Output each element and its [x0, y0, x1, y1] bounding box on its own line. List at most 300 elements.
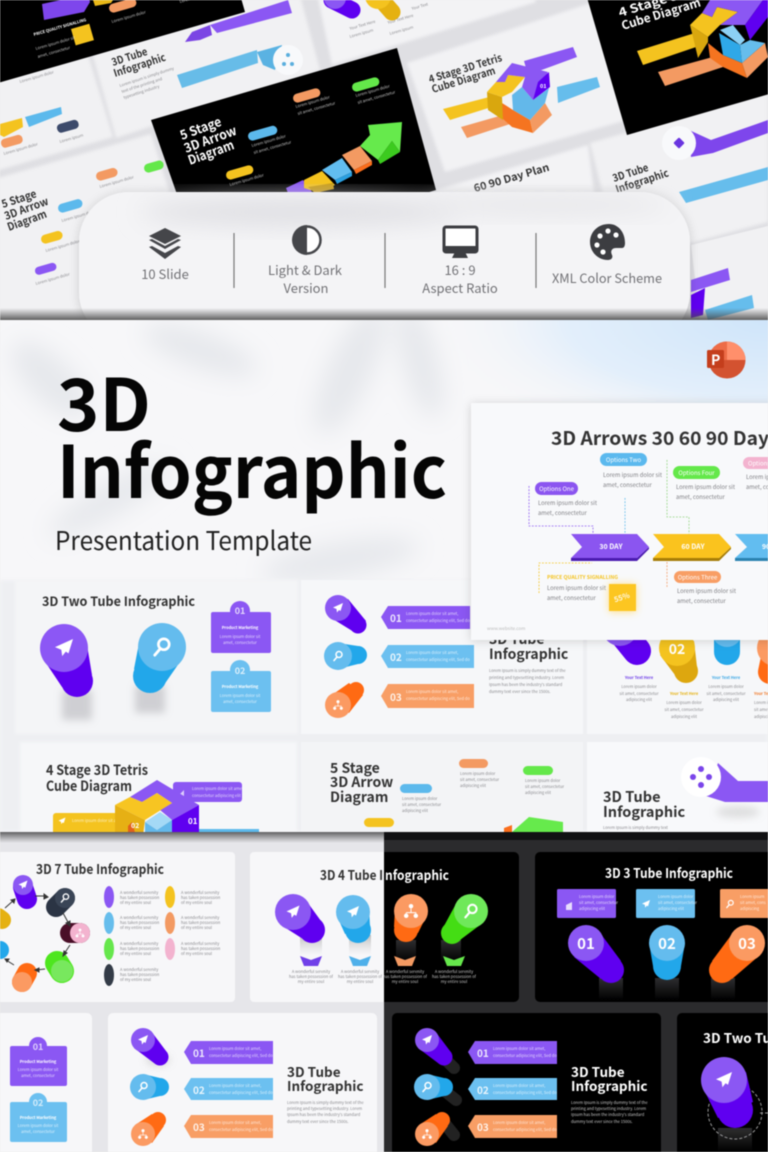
- arrow cards: consectetur adipiscing elit, Sed do: [406, 696, 470, 702]
- arrow cards: 02: [193, 1082, 205, 1097]
- slide: 5 stage arrow bottom: sit amet, consectetur: [402, 802, 441, 808]
- slide: 5 stage 3D arrow black: Lorem ipsum dolor: [229, 172, 265, 188]
- body text: Lorem ipsum dolor sit: [677, 586, 737, 595]
- body text: Lorem ipsum dolor sit: [676, 482, 736, 491]
- card: 01: Lorem ipsum dolor sit: [220, 634, 261, 640]
- feature: light and dark: Version: [284, 278, 328, 297]
- tube: purple: [275, 894, 325, 943]
- legend column one: of my entire soul: [120, 977, 151, 983]
- legend column one: [104, 886, 160, 986]
- body text: Lorem ipsum dolor sit: [547, 583, 607, 592]
- body text: PRICE QUALITY SIGNALLING: [547, 574, 618, 581]
- legend column one: A wonderful serenity: [120, 915, 159, 921]
- slide: four column tubes: adipiscing elit: [671, 714, 697, 720]
- arrow cards: Lorem ipsum dolor sit amet,: [209, 1046, 261, 1052]
- slide: marketing cards: Lorem ipsum dolor sit: [18, 1123, 59, 1129]
- pills: [364, 759, 553, 827]
- slide: 3D tube lower right: Infographic: [614, 165, 671, 197]
- card: 02: 02: [235, 664, 245, 677]
- slide: marketing cards: 01: [33, 1040, 43, 1053]
- arrow: 30 day: [571, 534, 649, 561]
- legend column two: of my entire soul: [181, 900, 212, 906]
- slide: 3D tube dark: 3D Tube: [571, 1061, 625, 1081]
- slide: 3D tube dark: [392, 1013, 661, 1152]
- legend column one: has taken possession: [120, 946, 160, 952]
- tube: blue: [712, 617, 742, 652]
- slide: 5 stage arrow bottom: [330, 758, 564, 834]
- slide: 3D tube dark: Ipsum has been the industry's standard: [571, 1112, 645, 1118]
- slide: 3D two tube dark: [677, 1013, 768, 1152]
- subheading: Presentation Template: [55, 521, 312, 558]
- tube 02: 02: [658, 933, 676, 954]
- slide: four column tubes: Your Text Here: [624, 675, 654, 681]
- pills: Options Three: [678, 572, 718, 582]
- card: 02: Product Marketing: [222, 683, 259, 690]
- slide: 3D 4 tube light half: A wonderful serenity: [292, 969, 331, 975]
- leaf shadows: [15, 320, 442, 578]
- slide: 3D tube lower right: [590, 95, 768, 242]
- slide: 3D tube dark: dummy text ever since the 1500s.: [571, 1119, 633, 1125]
- tube ring: [0, 875, 90, 992]
- slide: 3D 4 tube dark half: A wonderful serenity: [435, 969, 474, 975]
- slide: 5 stage arrow bottom: adipiscing elit: [525, 790, 551, 796]
- slide: marketing cards: amet, consectetur: [21, 1129, 55, 1135]
- slide: marketing cards: Product Marketing: [20, 1114, 57, 1121]
- arrow: 90 day: [735, 534, 768, 561]
- card: 02: amet, consectetur: [223, 699, 257, 705]
- slide: 3D tube light: 3D Tube: [110, 44, 149, 70]
- tube: yellow: [659, 630, 698, 683]
- arrow cards: Lorem ipsum dolor sit amet,: [209, 1120, 261, 1126]
- card: 02: Lorem ipsum dolor sit: [220, 693, 261, 699]
- legend column one: of my entire soul: [120, 900, 151, 906]
- slide: 5 stage arrow lower left: 3D Arrow: [2, 193, 51, 224]
- slide: 4 stage tetris bottom: Lorem ipsum dolor sit amet: [72, 818, 124, 824]
- slide: 3D 4 tube light half: my entire soul: [298, 979, 324, 985]
- slide: 3D 3 tube dark: [535, 852, 768, 1002]
- slide: 3D tube light: Lorem Ipsum is simply dummy text of the: [287, 1100, 364, 1106]
- section: hero: [0, 297, 768, 837]
- slide: 4 stage tetris bottom: 4 Stage 3D Tetris: [46, 760, 148, 780]
- tube: orange: [394, 894, 428, 942]
- slide: 3D arrows feature: www.website.com: [487, 625, 525, 632]
- cards: Lorem ipsum dolor: [579, 894, 615, 900]
- slide: tubes top: Lorem ipsum: [389, 24, 414, 37]
- legend column one: of my entire soul: [120, 925, 151, 931]
- tube 01: 01: [577, 933, 595, 954]
- slide row one: [0, 580, 768, 837]
- slide: tubes top: Your Text Here: [386, 13, 415, 26]
- icon: half circle: [292, 225, 320, 255]
- slide: 3D 7 tube: 3D 7 Tube Infographic: [36, 858, 164, 878]
- slide: 3D 4 tube dark half: [383, 852, 519, 1002]
- slide: 3D tube light: Lorem ipsum is simply dummy: [119, 65, 176, 89]
- slide: 60 90 day plan: [438, 146, 594, 192]
- slide: tubes top: Your Text: [410, 1, 429, 12]
- tube: green: [441, 894, 488, 944]
- cards: adipiscing elit: [579, 906, 605, 912]
- arrow cards: 01: [390, 610, 402, 625]
- slide: 5 stage arrow bottom: sit amet, consectetur: [525, 784, 564, 790]
- slide: four column tubes: Your Text Here: [669, 691, 699, 697]
- heading: [58, 376, 446, 517]
- legend column two: of my entire soul: [181, 925, 212, 931]
- slide: 4 stage tetris: Cube Diagram: [430, 63, 497, 97]
- slide: four column tubes: Lorem ipsum dolor: [666, 700, 702, 706]
- icon: palette: [590, 224, 625, 260]
- slide: marketing cards: Lorem ipsum dolor sit: [18, 1067, 59, 1073]
- feature: slides count: 10 Slide: [141, 264, 189, 283]
- slide: 3D tube light: Infographic: [112, 50, 168, 81]
- arrow cards: [381, 606, 474, 708]
- arrow cards: consectetur adipiscing elit, Sed do: [209, 1090, 273, 1096]
- slide: 3D tube list: printing and typesetting industry. Lorem: [489, 675, 564, 681]
- slide: 3D 4 tube dark half: my entire soul: [392, 979, 418, 985]
- slide: 5 stage arrow bottom: Diagram: [330, 787, 388, 807]
- slide: arrow diagram upper left: Lorem ipsum: [59, 132, 84, 145]
- slide: 3D 4 tube light half: [250, 852, 390, 1002]
- legend column two: A wonderful serenity: [181, 890, 220, 896]
- arrow steps: [286, 122, 402, 198]
- slide: 3D tube bottom right: Infographic: [603, 801, 686, 822]
- feature: slides count: [141, 228, 189, 283]
- arrow cards: 02: [390, 649, 402, 664]
- arrow cards: Lorem ipsum dolor sit amet,: [493, 1120, 545, 1126]
- slide: 5 stage 3D arrow black: sit amet, consectetur: [357, 89, 397, 106]
- icon: tetris cube black: [637, 0, 768, 86]
- slide: 5 stage arrow bottom: adipiscing elit: [402, 808, 428, 814]
- legend column two: has taken possession: [181, 920, 221, 926]
- slide: 4 stage tetris: [407, 0, 627, 172]
- section: bottom dark slides: [383, 832, 768, 1152]
- slide: 5 stage arrow bottom: Lorem ipsum dolor: [525, 778, 561, 784]
- tube: orange: [757, 630, 768, 672]
- legend column two: of my entire soul: [181, 951, 212, 957]
- slide: 3D 4 tube light half: 3D 4 Tube I: [320, 864, 383, 884]
- slide: 3D tube light: Ipsum has been the industry's standard: [287, 1112, 361, 1118]
- tube: purple: [602, 610, 638, 651]
- slide: 3D tube light: Infographic: [287, 1075, 363, 1095]
- tube 03: [709, 925, 765, 983]
- arrow cards: consectetur adipiscing elit, Sed do: [406, 618, 470, 624]
- slide: four column tubes: adipiscing elit: [626, 697, 652, 703]
- slide: 3D tube list: [324, 595, 568, 718]
- slide: four column tubes: sit amet, consectetur: [619, 691, 659, 697]
- slide: 5 stage 3D arrow black: sit amet, consectetur: [297, 100, 337, 117]
- arrows between tubes: [5, 894, 70, 972]
- section: bottom light slides: [0, 832, 390, 1152]
- arrow: 60 day: 60 DAY: [681, 542, 706, 552]
- arrow cards: consectetur adipiscing elit, Sed do: [406, 657, 470, 663]
- cards: [557, 889, 768, 918]
- slide: 3D tube lower right: 3D Tube: [611, 160, 650, 186]
- slide: 5 stage arrow bottom: Lorem ipsum dolor: [402, 796, 438, 802]
- legend column two: has taken possession: [181, 946, 221, 952]
- slide: 3D tube light: printing and typesetting industry. Lorem: [287, 1106, 362, 1112]
- slide: 3D tube list: Infographic: [489, 644, 568, 664]
- slide: marketing cards: 02: [33, 1096, 43, 1109]
- slide: 3D tube light: dummy text ever since the 1500s.: [287, 1119, 349, 1125]
- feature: aspect ratio: 16 : 9: [444, 260, 476, 279]
- legend column one: has taken possession: [120, 895, 160, 901]
- cards: sit amet, consectetur: [579, 900, 618, 906]
- arrow cards: consectetur adipiscing elit, Sed do: [209, 1053, 273, 1059]
- tube: purple: [40, 624, 93, 697]
- arrow cards: [184, 1041, 273, 1138]
- slide: 4 stage tetris black: [586, 0, 768, 135]
- pills: Options Two: [606, 455, 641, 464]
- slide: four column tubes: [606, 639, 768, 720]
- legend column one: has taken possession: [120, 920, 160, 926]
- arrow cards: 01: [193, 1045, 205, 1060]
- icon: tetris cube: [443, 47, 600, 138]
- slide: four column tubes: sit amet, consectetur: [706, 691, 746, 697]
- cards: sit amet, cons: [740, 900, 766, 906]
- feature: light and dark: Light & Dark: [268, 260, 343, 279]
- card: 01: 01: [235, 604, 245, 617]
- slide: 3D 4 tube dark half: has taken possession of: [383, 974, 428, 980]
- slide: 3D 4 tube light half: A wonderful serenity: [341, 969, 380, 975]
- slide: 5 stage arrow lower left: Diagram: [5, 206, 49, 235]
- slide: four column tubes: Lorem ipsum dolor: [708, 684, 744, 690]
- slide: black upper left: PRICE QUALITY SIGNALLING: [33, 17, 87, 38]
- feature: aspect ratio: [422, 227, 498, 297]
- legend column two: has taken possession: [181, 895, 221, 901]
- icon: tetris cube: 01: [188, 816, 198, 827]
- tube: blue: [336, 895, 371, 943]
- card: 01: [211, 601, 271, 653]
- slide: 5 stage arrow bottom: 5 Stage: [330, 758, 380, 778]
- slide: 3D tube list: Ipsum has been the industry's standard: [489, 682, 563, 688]
- slide: 3D 4 tube dark half: my entire soul: [441, 979, 467, 985]
- body text: amet, consectetur: [538, 508, 588, 517]
- slide: black upper left: Lorem ipsum dolor sit: [35, 35, 76, 52]
- slide: 3D tube list: Lorem Ipsum is simply dummy text of the: [489, 668, 566, 674]
- tubes: [324, 595, 367, 718]
- slide: black upper left: amet, consectetur: [37, 45, 71, 60]
- slide: 3D two tube: 3D Two Tube Infographic: [42, 591, 195, 610]
- slide: 3D 4 tube dark half: nfographic: [385, 864, 449, 884]
- callout: 55 percent: [609, 584, 636, 612]
- slide: four column tubes: sit amet, consectetur: [664, 707, 704, 713]
- tubes: [130, 1028, 170, 1146]
- slide: 5 stage arrow bottom: 3D Arrow: [330, 772, 393, 792]
- arrow: 60 day: [653, 534, 731, 561]
- cards: sit amet, consectetur: [658, 900, 697, 906]
- card: 02: [211, 660, 271, 712]
- legend column two: [165, 886, 221, 960]
- slide: four column tubes: adipiscing elit: [713, 697, 739, 703]
- arrow cards: consectetur adipiscing elit, Sed do: [209, 1127, 273, 1133]
- tube: yellow: 02: [669, 639, 685, 659]
- heading: Infographic: [57, 414, 447, 519]
- arrow: 30 day: 30 DAY: [599, 542, 624, 552]
- slide: black upper left: [0, 0, 245, 83]
- legend column one: A wonderful serenity: [120, 941, 159, 947]
- arrow cards: 03: [477, 1119, 489, 1134]
- legend column two: A wonderful serenity: [181, 941, 220, 947]
- body text: amet, consectetur: [603, 480, 653, 489]
- panel: feature strip: [75, 184, 694, 316]
- body text: amet, consectetur: [676, 492, 726, 501]
- pills: Options One: [539, 484, 575, 493]
- slide: arrow diagram upper left: Lorem ipsum dolor: [19, 69, 55, 85]
- tube 03: 03: [738, 933, 756, 954]
- slide: 4 stage tetris bottom: consectetur adipiscing elit: [192, 793, 241, 799]
- slide: cube lower right: [691, 226, 768, 320]
- slide: 60 90 day plan: 60 90 Day Plan: [472, 160, 551, 196]
- slide: marketing cards: amet, consectetur: [21, 1073, 55, 1079]
- slide: tubes top: Lorem ipsum: [349, 27, 374, 40]
- slide: 4 stage tetris bottom: [46, 760, 259, 837]
- slide: 4 stage tetris bottom: Lorem ipsum dolor sit amet,: [192, 786, 244, 792]
- slide: 3D two tube: [40, 591, 271, 720]
- slide: 4 stage tetris bottom: Cube Diagram: [46, 776, 132, 796]
- body text: amet, consectetur: [677, 596, 727, 605]
- slide: 3D 4 tube light half: has taken possession of: [289, 974, 334, 980]
- pills: [225, 76, 380, 181]
- slide: 5 stage arrow bottom: adipiscing elit: [460, 783, 486, 789]
- slide: 3D tube light: 3D Tube: [287, 1061, 341, 1081]
- tube: purple: [701, 1057, 753, 1128]
- slide: 3D 4 tube dark half: A wonderful serenity: [386, 969, 425, 975]
- arrow cards: 03: [193, 1119, 205, 1134]
- slide: 5 stage 3D arrow black: 5 Stage: [177, 111, 224, 144]
- slide: 5 stage 3D arrow black: Lorem ipsum dolor: [355, 83, 391, 99]
- tubes: [414, 1028, 456, 1146]
- feature: xml colors: XML Color Scheme: [552, 268, 662, 287]
- slide: 5 stage arrow bottom: Lorem ipsum dolor: [460, 771, 496, 777]
- heading: 3D: [57, 347, 151, 452]
- slide: 3D tube dark: printing and typesetting industry. Lorem: [571, 1106, 646, 1112]
- arrow cards: consectetur adipiscing elit, Sed do: [493, 1127, 557, 1133]
- slide: 3D 4 tube dark half: has taken possession of: [432, 974, 477, 980]
- slide: 5 stage arrow lower left: Lorem ipsum dolor: [61, 208, 97, 224]
- cards: adipiscing: [740, 906, 760, 912]
- slide: 5 stage arrow bottom: sit amet, consectetur: [460, 777, 499, 783]
- slide: arrow diagram upper left: Lorem ipsum dolor: [3, 141, 39, 157]
- slide: 3D tube list: 3D Tube: [489, 629, 545, 649]
- icon: tetris cube: 01: [540, 82, 546, 90]
- slide: 5 stage arrow lower left: 5 Stage: [0, 185, 38, 212]
- arrow cards: Lorem ipsum dolor sit amet,: [493, 1083, 545, 1089]
- arrow cards: consectetur adipiscing elit, Sed do: [493, 1053, 557, 1059]
- arrow cards: Lorem ipsum dolor sit amet,: [209, 1083, 261, 1089]
- slide: 3D tube light: [108, 1013, 377, 1152]
- slide: four column tubes: Your Text Here: [711, 675, 741, 681]
- slide: 4 stage tetris: 4 Stage 3D Tetris: [427, 50, 504, 87]
- slide: 3D arrows feature: [471, 403, 768, 640]
- icon: monitor: [443, 227, 478, 258]
- slide: 3D 7 tube: [0, 852, 235, 1002]
- slide: 5 stage 3D arrow black: sit amet, consectetur: [253, 139, 293, 156]
- slide: 5 stage arrow lower left: Lorem ipsum dolor: [35, 271, 71, 287]
- legend column one: of my entire soul: [120, 951, 151, 957]
- slide: 3D tube bottom right: Lorem Ipsum is simply dummy text: [603, 825, 668, 831]
- slide: 3D arrows feature: 3D Arrows 30 60 90 Day: [551, 424, 768, 451]
- pills: Options Four: [678, 468, 715, 477]
- arrow cards: 01: [477, 1045, 489, 1060]
- arrow cards: 03: [390, 689, 402, 704]
- body text: [538, 470, 768, 605]
- tube: blue: [133, 623, 186, 693]
- arrow cards: Lorem ipsum dolor sit amet,: [493, 1046, 545, 1052]
- legend column one: has taken possession: [120, 972, 160, 978]
- slide: 3D tube light: [80, 0, 320, 138]
- arrow cards: consectetur adipiscing elit, Sed do: [493, 1090, 557, 1096]
- tube 02: [649, 925, 685, 980]
- cards: Lorem ipsum dolor: [658, 894, 694, 900]
- dashed connectors: [529, 460, 689, 593]
- legend column two: A wonderful serenity: [181, 915, 220, 921]
- body text: amet, consectetur: [547, 593, 597, 602]
- pills: [535, 453, 768, 583]
- feature: xml colors: [552, 224, 662, 287]
- slide: tubes top: [310, 0, 536, 65]
- slide: 3D tube dark: Infographic: [571, 1075, 647, 1095]
- slide: 5 stage arrow lower left: Lorem ipsum dolor: [45, 238, 81, 254]
- body text: Lorem ipsum dolor sit: [538, 498, 598, 507]
- slide: 3D tube bottom right: [603, 757, 768, 831]
- icon: tetris cube: [115, 780, 199, 836]
- cards: Lorem ipsum: [740, 894, 765, 900]
- legend column one: A wonderful serenity: [120, 890, 159, 896]
- arrow cards: 02: [477, 1082, 489, 1097]
- icon: tetris cube: 02: [131, 821, 139, 831]
- arrow cards: [468, 1041, 557, 1138]
- slide: four column tubes: Lorem ipsum dolor: [621, 684, 657, 690]
- slide: 3D 4 tube light half: has taken possession of: [338, 974, 383, 980]
- slide: 3D tube light: text of the printing and: [121, 76, 164, 95]
- slide: 3D 3 tube dark: 3D 3 Tube Infographic: [605, 862, 733, 882]
- slide: 5 stage 3D arrow black: 3D Arrow: [181, 120, 239, 157]
- slide: 3D tube bottom right: 3D Tube: [603, 786, 661, 807]
- slide: 3D 4 tube light half: my entire soul: [347, 979, 373, 985]
- slide: 5 stage 3D arrow black: Lorem ipsum dolor: [295, 94, 331, 110]
- slide: 3D tube light: typesetting industry: [123, 83, 161, 101]
- slide: 5 stage 3D arrow black: Diagram: [185, 134, 236, 169]
- feature: light and dark: [268, 225, 343, 297]
- slide: 5 stage 3D arrow black: [150, 47, 436, 193]
- slide: black upper left: Lorem ipsum dolor: [111, 9, 147, 25]
- icon: PowerPoint: [707, 342, 746, 378]
- cards: adipiscing elit: [658, 906, 684, 912]
- slide: tubes top: Your Text Here: [348, 19, 377, 32]
- card: 01: amet, consectetur: [223, 640, 257, 646]
- icon: PowerPoint: P: [711, 350, 720, 370]
- legend column one: A wonderful serenity: [120, 967, 159, 973]
- slide: marketing cards: Product Marketing: [20, 1058, 57, 1065]
- callout: 55 percent: 55%: [613, 590, 631, 605]
- tube 01: [568, 925, 624, 983]
- section: angled slide collage: [0, 0, 768, 342]
- icon: layers: [149, 228, 181, 259]
- slide: 5 stage arrow lower left: Lorem ipsum dolor: [99, 174, 135, 190]
- slide: 5 stage arrow lower left: [0, 134, 168, 316]
- body text: Lorem ipsum dolor sit: [603, 470, 663, 479]
- card: 01: Product Marketing: [222, 624, 259, 631]
- slide: 3D tube list: dummy text ever since the 1500s.: [489, 689, 551, 695]
- slide: 3D tube dark: Lorem Ipsum is simply dummy text of the: [571, 1100, 648, 1106]
- arrow cards: Lorem ipsum dolor sit amet,: [406, 689, 458, 695]
- slide: arrow diagram upper left: [0, 58, 112, 170]
- slide: 5 stage 3D arrow black: Lorem ipsum dolor: [251, 133, 287, 149]
- arrow cards: Lorem ipsum dolor sit amet,: [406, 611, 458, 617]
- slide: marketing cards: [0, 1013, 92, 1152]
- feature: aspect ratio: Aspect Ratio: [422, 278, 498, 297]
- arrow: green: [512, 817, 563, 832]
- arrow cards: Lorem ipsum dolor sit amet,: [406, 650, 458, 656]
